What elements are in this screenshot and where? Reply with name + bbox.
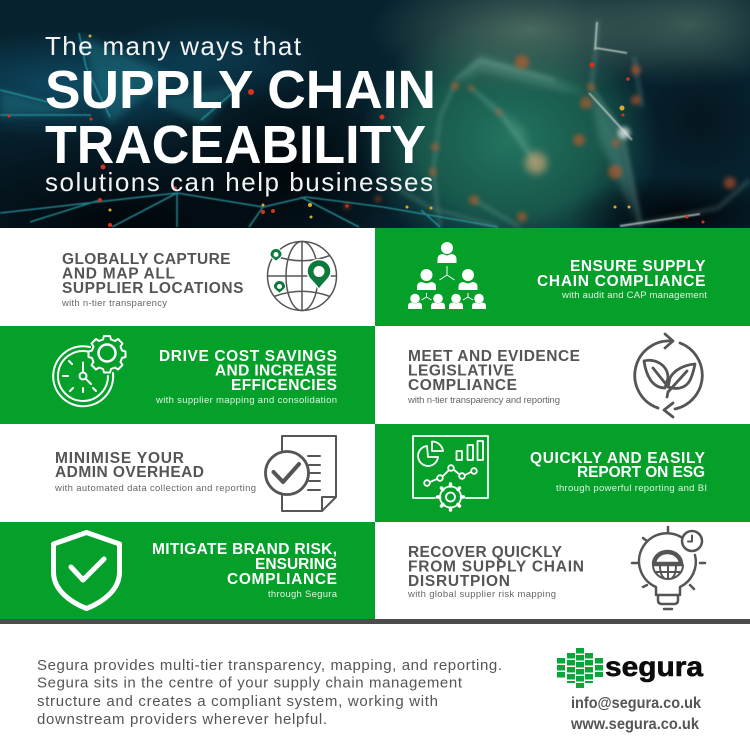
logo mark	[561, 648, 599, 688]
icon: people hierarchy	[408, 242, 486, 309]
panel: ensure compliance	[375, 228, 750, 326]
title line: intro: The many ways that	[45, 31, 302, 61]
heading: EFFICENCIES	[231, 377, 337, 394]
heading: QUICKLY AND EASILY	[530, 450, 706, 467]
subtext: with n-tier transparency	[61, 298, 167, 309]
footer description: downstream providers wherever helpful.	[37, 711, 327, 728]
contact details	[570, 695, 701, 733]
heading: ENSURING	[255, 556, 337, 573]
heading	[408, 348, 580, 394]
panel: recover quickly	[375, 522, 750, 620]
title line: traceability: TRACEABILITY	[45, 115, 426, 175]
panel: meet legislative compliance	[375, 326, 750, 424]
logo: segura	[561, 648, 703, 688]
heading	[537, 258, 706, 290]
heading: DRIVE COST SAVINGS	[159, 348, 337, 365]
contact details: www.segura.co.uk	[570, 716, 699, 733]
heading: CHAIN COMPLIANCE	[537, 273, 706, 290]
icon: shield with check	[54, 532, 120, 608]
icon: clock and gear	[53, 336, 125, 406]
icon: leaf in recycling arrows	[635, 334, 702, 417]
heading: LEGISLATIVE	[408, 362, 514, 380]
contact details: info@segura.co.uk	[571, 695, 701, 712]
panel: quickly report ESG	[375, 424, 750, 522]
subtext: through Segura	[268, 589, 338, 600]
heading: DISRUTPION	[408, 573, 510, 590]
subtext: with supplier mapping and consolidation	[155, 395, 337, 406]
subtext: with automated data collection and reporting	[54, 483, 256, 494]
heading: GLOBALLY CAPTURE	[62, 251, 230, 268]
divider bar	[0, 619, 750, 624]
heading	[62, 251, 244, 297]
heading: AND MAP ALL	[62, 266, 175, 282]
footer description: structure and creates a compliant system, working with	[37, 693, 438, 710]
subtext: with global supplier risk mapping	[407, 589, 556, 600]
subtext: with n-tier transparency and reporting	[407, 395, 560, 406]
footer description: Segura sits in the centre of your supply chain management	[37, 674, 463, 692]
title line: outro: solutions can help businesses	[45, 167, 433, 197]
footer description: Segura provides multi-tier transparency, mapping, and reporting.	[37, 657, 502, 674]
panel: drive cost savings	[0, 326, 375, 424]
heading: RECOVER QUICKLY	[408, 544, 563, 561]
heading: MITIGATE BRAND RISK,	[152, 541, 337, 558]
heading: ADMIN OVERHEAD	[55, 464, 204, 481]
heading: SUPPLIER LOCATIONS	[62, 280, 244, 297]
heading: COMPLIANCE	[227, 571, 337, 588]
footer description	[37, 657, 502, 728]
heading	[408, 544, 584, 590]
heading: AND INCREASE	[215, 362, 337, 380]
title line: supply chain: SUPPLY CHAIN	[45, 60, 436, 120]
heading: COMPLIANCE	[408, 377, 517, 394]
panel: minimise admin	[0, 424, 375, 522]
heading	[530, 450, 706, 481]
heading	[55, 450, 204, 481]
heading	[152, 541, 337, 588]
panel: globally capture	[0, 228, 375, 326]
hero: network photo background	[0, 0, 750, 228]
icon: lightbulb with globe and clock	[632, 527, 705, 609]
heading: ENSURE SUPPLY	[570, 258, 706, 275]
logo wordmark: segura	[605, 651, 703, 682]
icon: globe with map pins	[268, 242, 336, 310]
icon: document with check	[266, 436, 336, 511]
heading	[159, 348, 337, 394]
title block	[45, 31, 436, 197]
heading: REPORT ON ESG	[577, 464, 705, 481]
subtext: with audit and CAP management	[561, 290, 707, 301]
subtext: through powerful reporting and BI	[556, 483, 707, 494]
heading: MINIMISE YOUR	[55, 450, 184, 467]
panel: mitigate brand risk	[0, 522, 375, 620]
icon: report dashboard	[413, 436, 488, 510]
heading: FROM SUPPLY CHAIN	[408, 558, 584, 576]
heading: MEET AND EVIDENCE	[408, 348, 580, 365]
